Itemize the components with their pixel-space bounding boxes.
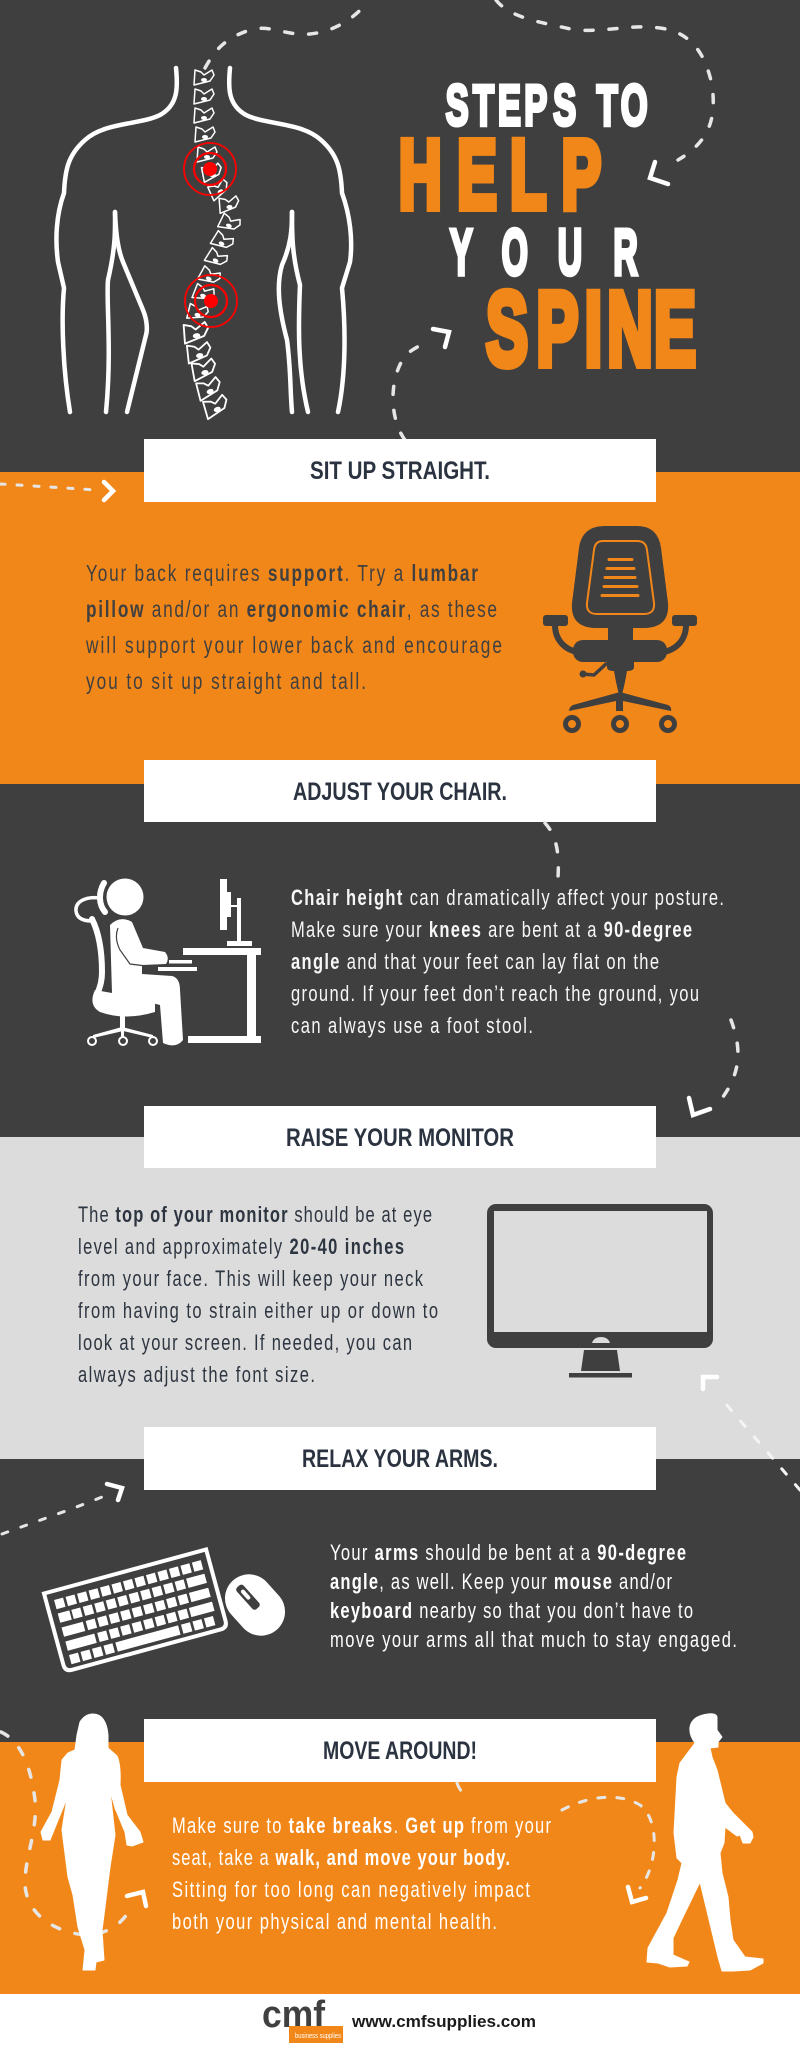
heading box: ADJUST YOUR CHAIR.	[293, 778, 507, 806]
illustration: back and spine	[56, 68, 351, 419]
body text: move your arms all that much to stay engaged.	[330, 1628, 737, 1653]
dashed path top right	[496, 0, 713, 160]
body text	[85, 562, 502, 695]
body text: Your back requires support. Try a lumbar	[86, 562, 478, 587]
dashed arrow to monitor	[703, 1377, 800, 1490]
header background	[0, 0, 800, 472]
silhouette: man walking	[647, 1714, 763, 1971]
panel: adjust your chair	[0, 760, 800, 1137]
website url: www.cmfsupplies.com	[351, 2012, 536, 2031]
panel: header	[0, 0, 800, 472]
heading box: MOVE AROUND!	[323, 1737, 477, 1765]
heading box	[144, 1106, 656, 1168]
icon: office chair	[543, 526, 697, 730]
arrowhead top right	[650, 162, 668, 184]
body text: you to sit up straight and tall.	[86, 670, 366, 695]
body text: will support your lower back and encourage	[85, 634, 502, 659]
body text: angle and that your feet can lay flat on the	[291, 950, 659, 975]
heading box: SIT UP STRAIGHT.	[310, 457, 490, 485]
title line: help: HELP	[399, 121, 601, 230]
pain target upper	[184, 143, 236, 195]
body text: Sitting for too long can negatively impact	[172, 1878, 531, 1903]
title line: spine: SPINE	[486, 272, 696, 388]
dashed arrow left	[2, 1484, 122, 1534]
dashed loop right	[562, 1797, 654, 1902]
body text	[330, 1541, 737, 1653]
footer	[262, 1994, 536, 2043]
panel: move around	[0, 1714, 800, 1994]
body text: keyboard nearby so that you don’t have to	[330, 1599, 693, 1624]
heading box	[144, 1427, 656, 1490]
body text: from having to strain either up or down to	[78, 1299, 438, 1324]
panel: sit up straight	[0, 439, 800, 784]
body text: level and approximately 20-40 inches	[78, 1235, 404, 1260]
arrowhead title lower	[433, 329, 449, 347]
spine vertebrae	[182, 70, 242, 419]
band	[0, 1742, 800, 1994]
body text: Chair height can dramatically affect your posture.	[291, 886, 724, 911]
heading box	[144, 760, 656, 822]
body text: can always use a foot stool.	[291, 1014, 533, 1039]
body text	[78, 1203, 438, 1388]
body text: seat, take a walk, and move your body.	[172, 1846, 510, 1871]
body text: look at your screen. If needed, you can	[78, 1331, 412, 1356]
logo: cmf business supplies: business supplies	[295, 2031, 341, 2040]
body text: both your physical and mental health.	[172, 1910, 497, 1935]
dashed short line	[457, 1783, 469, 1801]
body text: Make sure your knees are bent at a 90-degree	[291, 918, 692, 943]
dashed path upper	[545, 823, 558, 877]
silhouette: woman walking	[41, 1714, 143, 1970]
heading box: RELAX YOUR ARMS.	[302, 1445, 498, 1473]
body text	[172, 1814, 551, 1935]
panel: raise your monitor	[0, 1106, 800, 1459]
band	[0, 472, 800, 784]
dashed path top left	[205, 6, 364, 68]
icon: monitor	[487, 1204, 713, 1378]
heading box	[144, 439, 656, 502]
dashed path to spine arrow	[393, 342, 430, 440]
body text: angle, as well. Keep your mouse and/or	[330, 1570, 672, 1595]
body text	[291, 886, 724, 1039]
torso outline	[56, 68, 351, 412]
dashed arrow right	[689, 1020, 738, 1115]
icon: person seated at desk	[76, 878, 261, 1045]
icon: mouse	[215, 1564, 295, 1646]
title line: steps to: STEPS TO	[446, 74, 648, 138]
pain target lower	[185, 275, 237, 327]
band	[0, 1459, 800, 1742]
dashed arrow	[0, 482, 113, 500]
body text: pillow and/or an ergonomic chair, as these	[86, 598, 497, 623]
title line: your: YOUR	[450, 216, 638, 289]
body text: Make sure to take breaks. Get up from your	[172, 1814, 551, 1839]
title	[399, 74, 696, 388]
body text: ground. If your feet don’t reach the ground, you	[291, 982, 699, 1007]
logo: cmf business supplies: cmf	[262, 1994, 325, 2036]
band	[0, 1137, 800, 1459]
body text: Your arms should be bent at a 90-degree	[330, 1541, 686, 1566]
body text: The top of your monitor should be at eye	[78, 1203, 432, 1228]
heading box: RAISE YOUR MONITOR	[286, 1124, 514, 1152]
heading box	[144, 1719, 656, 1782]
panel: relax your arms	[0, 1377, 800, 1742]
dashed loop left	[1, 1732, 146, 1935]
body text: always adjust the font size.	[78, 1363, 315, 1388]
icon: keyboard	[44, 1549, 227, 1672]
body text: from your face. This will keep your neck	[78, 1267, 423, 1292]
band	[0, 784, 800, 1137]
